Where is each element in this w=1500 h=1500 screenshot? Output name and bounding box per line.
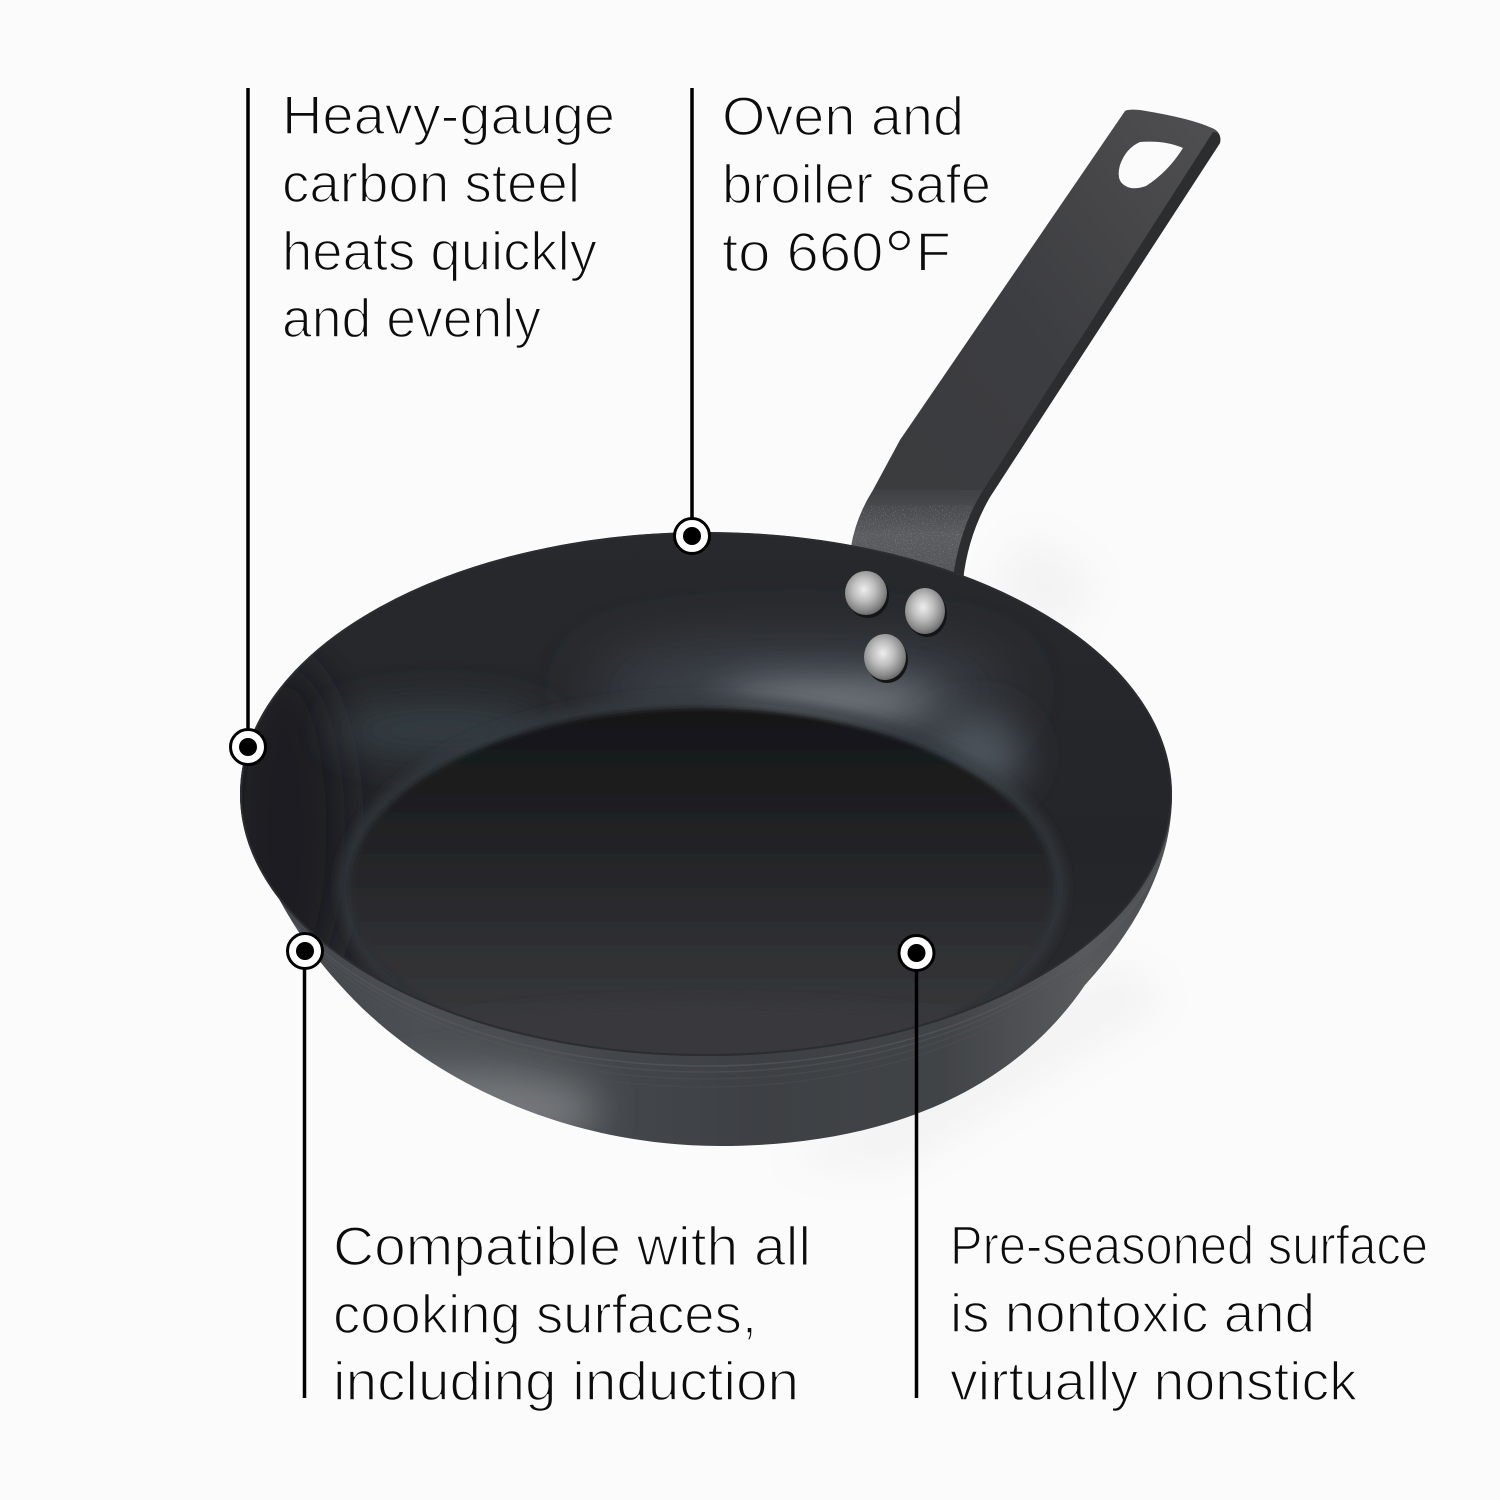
textured neck of handle (851, 490, 984, 580)
callout: oven and broiler safe: Oven and (722, 85, 964, 147)
soft shadow behind pan (780, 530, 1170, 1170)
callout: oven and broiler safe (674, 85, 991, 554)
wall sheen above cooking surface (590, 652, 1010, 728)
callout: compatible with all cooking surfaces (288, 934, 811, 1412)
callout: heavy-gauge carbon steel (230, 84, 615, 764)
callout: heavy-gauge carbon steel: heats quickly (282, 220, 597, 282)
callout: oven and broiler safe: broiler safe (722, 153, 991, 215)
callout: compatible with all cooking surfaces: including induction (333, 1350, 799, 1412)
pan rim and inner wall (225, 532, 1172, 1100)
callout: pre-seasoned surface (899, 936, 1428, 1412)
callout: heavy-gauge carbon steel: Heavy-gauge (282, 84, 615, 146)
callout: pre-seasoned surface: Pre-seasoned surface (950, 1214, 1428, 1276)
callout: heavy-gauge carbon steel: carbon steel (282, 152, 580, 214)
left wall shade (240, 668, 336, 945)
rivets (845, 571, 947, 683)
callout: compatible with all cooking surfaces: Compatible with all (333, 1215, 811, 1277)
pan handle (851, 110, 1220, 580)
handle side edge (953, 132, 1220, 580)
callout: oven and broiler safe: F (916, 221, 951, 283)
infographic: carbon steel pan features (229, 88, 1426, 1411)
frying pan (225, 110, 1220, 1170)
pan outer body (278, 797, 1172, 1146)
callout: oven and broiler safe: ° (883, 215, 916, 300)
callout: heavy-gauge carbon steel: and evenly (282, 287, 541, 349)
callout: oven and broiler safe: to 660 (722, 221, 875, 283)
callout: pre-seasoned surface: is nontoxic and (950, 1282, 1315, 1344)
callout: compatible with all cooking surfaces: cooking surfaces, (333, 1283, 757, 1345)
light band around cooking surface (336, 694, 1066, 1010)
pan cooking surface (356, 706, 1049, 1016)
front wall blend (376, 1000, 1036, 1100)
callout: pre-seasoned surface: virtually nonstick (950, 1350, 1357, 1412)
